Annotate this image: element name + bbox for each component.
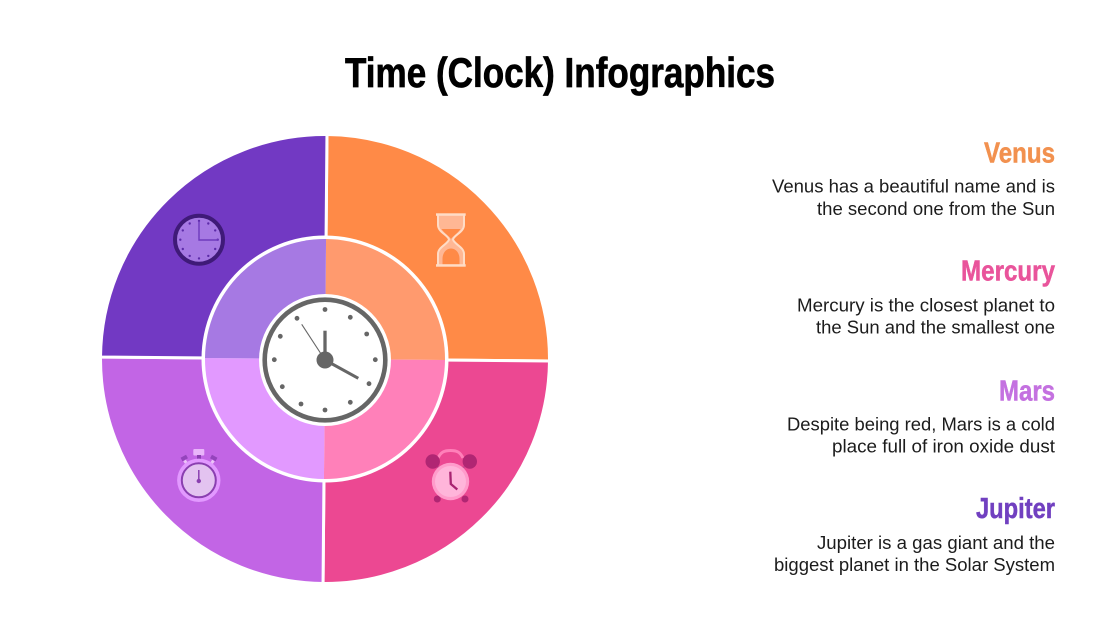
text block: Venus: Venus has a beautiful name and is bbox=[772, 177, 1055, 197]
icon: alarm clock bbox=[426, 450, 477, 502]
clock wheel chart bbox=[99, 133, 551, 585]
segment: dark purple inner bbox=[205, 238, 326, 359]
text block: Mars: place full of iron oxide dust bbox=[832, 437, 1055, 457]
segment: light purple outer bbox=[99, 357, 325, 583]
text block: Venus bbox=[772, 138, 1055, 219]
icon: stopwatch bbox=[177, 449, 220, 502]
icon: central clock bbox=[259, 294, 391, 426]
segment: pink inner bbox=[324, 359, 445, 480]
text block: Mercury: Mercury is the closest planet to bbox=[797, 296, 1055, 316]
icon: wall clock bbox=[175, 216, 223, 264]
text block: Venus: Venus bbox=[984, 138, 1055, 170]
segment: orange inner bbox=[325, 239, 446, 360]
text block: Mars bbox=[787, 376, 1055, 457]
segment: dark purple outer bbox=[101, 133, 327, 359]
text block: Venus: the second one from the Sun bbox=[817, 199, 1055, 219]
text block: Jupiter bbox=[774, 493, 1055, 575]
segment: light purple inner bbox=[204, 358, 325, 479]
text block: Mercury: the Sun and the smallest one bbox=[816, 317, 1055, 337]
icon: hourglass bbox=[436, 213, 466, 267]
text block: Mercury: Mercury bbox=[961, 256, 1055, 288]
segment: pink outer bbox=[323, 359, 549, 585]
text block: Mars: Despite being red, Mars is a cold bbox=[787, 415, 1055, 435]
text block: Jupiter: Jupiter bbox=[976, 493, 1055, 525]
text block: Mercury bbox=[797, 256, 1055, 337]
panel: inner ring quadrants bbox=[200, 234, 450, 484]
text block: Mars: Mars bbox=[999, 376, 1055, 408]
title: Time (Clock) Infographics bbox=[345, 49, 775, 96]
panel: outer ring quadrants bbox=[99, 133, 551, 585]
text block: Jupiter: biggest planet in the Solar System bbox=[774, 555, 1055, 575]
text block: Jupiter: Jupiter is a gas giant and the bbox=[817, 533, 1055, 553]
segment: orange outer bbox=[325, 135, 551, 361]
